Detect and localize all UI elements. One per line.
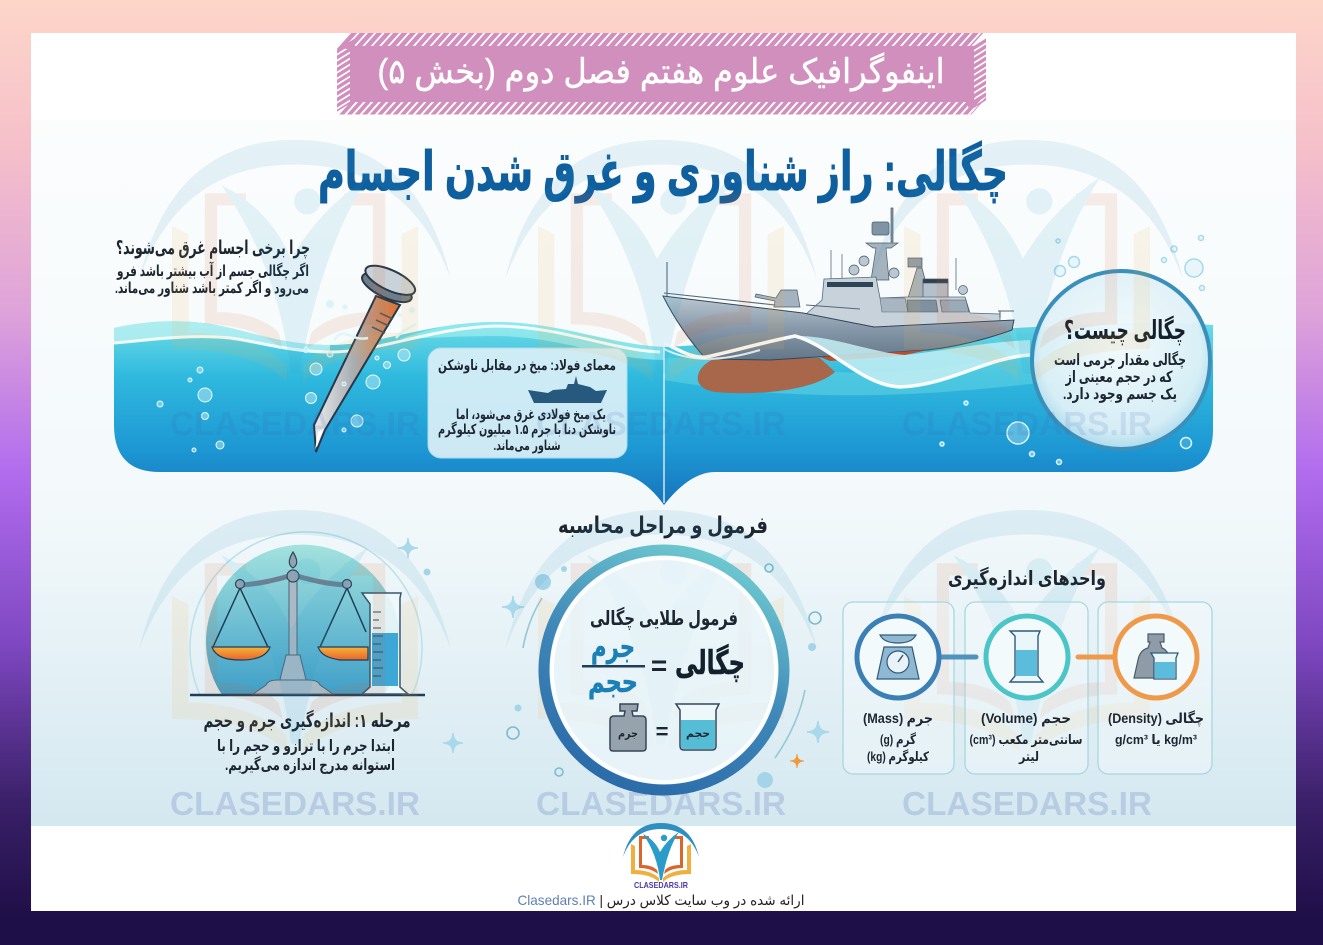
icon: ship silhouette <box>528 376 607 403</box>
heading: چرا برخی اجسام غرق می‌شوند؟ <box>116 238 310 259</box>
callout bubble: what is density <box>1032 271 1210 449</box>
icon: balance scale <box>212 552 368 694</box>
banner: scribble ribbon title <box>344 41 979 106</box>
unit: density <box>1108 616 1204 747</box>
superstructure <box>806 277 1000 328</box>
watermark layer <box>139 140 1183 822</box>
watermark layer: CLASEDARS.IR <box>902 785 1152 822</box>
step text line 2: استوانه مدرج اندازه می‌گیریم. <box>225 755 395 774</box>
banner title text: اینفوگرافیک علوم هفتم فصل دوم (بخش ۵) <box>378 52 944 92</box>
density units: kg/m³ یا g/cm³ <box>1115 732 1198 747</box>
foreground waves <box>664 336 1030 387</box>
hull body <box>663 296 1014 360</box>
panel text line 3: شناور می‌ماند. <box>494 437 560 454</box>
panel text line 1: یک میخ فولادی غرق می‌شود، اما <box>456 406 606 423</box>
mass unit grams: گرم (g) <box>880 732 916 748</box>
step text line 1: ابتدا جرم را با ترازو و حجم را با <box>217 738 395 755</box>
decorative sparkles and dots <box>398 538 829 788</box>
icon: beaker <box>676 704 719 750</box>
bubble line 3: یک جسم وجود دارد. <box>1063 386 1177 403</box>
body line 2: می‌رود و اگر کمتر باشد شناور می‌ماند. <box>115 279 309 297</box>
gun turret <box>755 290 800 307</box>
panel: step 1 measure <box>190 532 425 774</box>
watermark layer: CLASEDARS.IR <box>536 405 786 442</box>
units heading: واحدهای اندازه‌گیری <box>948 566 1106 590</box>
panel heading: معمای فولاد: میخ در مقابل ناوشکن <box>438 358 616 374</box>
fraction numerator: جرم <box>591 631 635 665</box>
illustration: nail in water <box>157 260 419 452</box>
body line 1: اگر چگالی جسم از آب بیشتر باشد فرو <box>116 262 309 281</box>
submerged hull <box>698 358 835 393</box>
bubble heading: چگالی چیست؟ <box>1064 315 1186 345</box>
fraction bar <box>582 665 645 668</box>
equals sign small: = <box>656 719 668 744</box>
splash <box>334 324 416 340</box>
bow mast and railings <box>664 262 1014 318</box>
footer logo <box>623 823 699 890</box>
main title: چگالی: راز شناوری و غرق شدن اجسام <box>318 140 1008 203</box>
illustration circle <box>206 545 400 695</box>
connector orange <box>1078 654 1113 660</box>
nail shaft <box>314 296 400 452</box>
panel: steel puzzle <box>428 348 627 458</box>
unit: mass <box>857 616 939 765</box>
water band panel <box>114 321 1213 505</box>
density label: چگالی (Density) <box>1108 710 1204 727</box>
step heading: مرحله ۱: اندازه‌گیری جرم و حجم <box>204 709 410 732</box>
masts and radar <box>831 208 968 302</box>
beaker label: حجم <box>686 728 710 740</box>
bubble line 2: که در حجم معینی از <box>1065 369 1173 386</box>
divider line with arrow point <box>663 347 665 503</box>
volume unit liter: لیتر <box>1018 749 1039 764</box>
volume unit cubic: سانتی‌متر مکعب (cm³) <box>970 732 1082 747</box>
unit: volume <box>970 616 1082 764</box>
panel text line 2: ناوشکن دنا با جرم ۱.۵ میلیون کیلوگرم <box>438 421 616 438</box>
density word: چگالی <box>675 643 745 682</box>
infographic image background <box>31 120 1296 826</box>
formula heading: فرمول طلایی چگالی <box>590 606 738 631</box>
footer caption: ارائه شده در وب سایت کلاس درس | Clasedars.IR <box>518 892 804 909</box>
illustration: warship <box>663 208 1014 393</box>
connectors <box>942 654 976 660</box>
ground line <box>190 694 425 696</box>
bubble line 1: چگالی مقدار جرمی است <box>1054 350 1186 370</box>
equals sign: = <box>651 650 667 681</box>
section heading: formula and steps: فرمول و مراحل محاسبه <box>558 512 768 539</box>
panel: golden formula <box>544 550 784 790</box>
mass label: جرم (Mass) <box>863 710 933 727</box>
fraction denominator: حجم <box>588 666 638 700</box>
card outlines <box>843 602 1212 774</box>
callout: why objects sink <box>115 238 310 297</box>
icon: weight <box>610 704 646 751</box>
weight label: جرم <box>618 728 638 740</box>
mass unit kilograms: کیلوگرم (kg) <box>867 749 929 765</box>
watermark layer: CLASEDARS.IR <box>902 405 1152 442</box>
footer logo wordmark: CLASEDARS.IR <box>634 880 688 890</box>
panel: measurement units <box>843 566 1212 774</box>
nail head <box>358 260 419 308</box>
watermark layer: CLASEDARS.IR <box>170 405 420 442</box>
watermark layer: CLASEDARS.IR <box>170 785 420 822</box>
icon: measuring cylinder <box>362 593 408 694</box>
decorative bubbles right <box>940 236 1204 464</box>
volume label: حجم (Volume) <box>981 710 1071 726</box>
air bubbles <box>157 300 415 452</box>
watermark layer: CLASEDARS.IR <box>536 785 786 822</box>
